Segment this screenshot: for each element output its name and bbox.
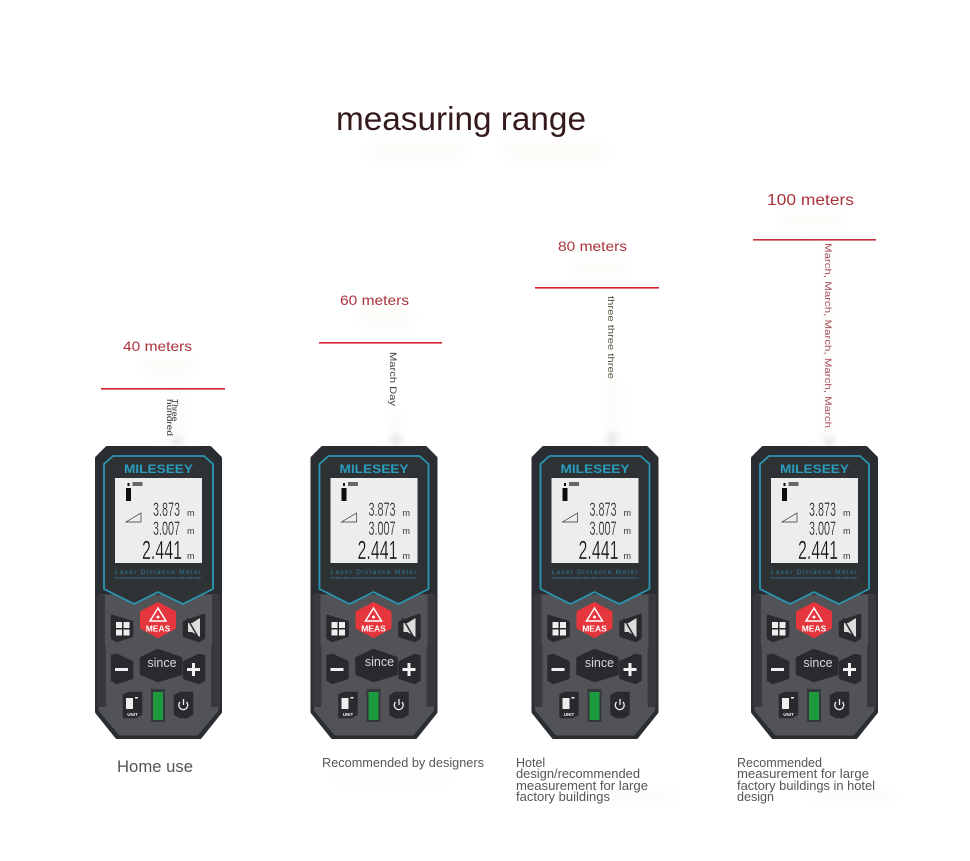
minus button <box>328 655 348 683</box>
minus button <box>768 655 788 683</box>
MEAS button: MEAS <box>802 624 827 634</box>
teal bezel <box>320 456 428 604</box>
caption: factory buildings: design <box>737 790 774 804</box>
vertical note: March Day <box>387 352 398 406</box>
column: 100 meters <box>753 192 876 428</box>
MEAS button: MEAS <box>582 624 607 634</box>
measure line <box>535 287 659 289</box>
vertical note: three three three <box>605 296 616 379</box>
product caption: Laser Distance Meter <box>552 569 638 576</box>
unit button: UNIT <box>343 712 353 717</box>
LCD screen: 2.441 <box>142 535 182 565</box>
plus button <box>184 655 204 683</box>
vertical note: March, March, March, March, March <box>822 243 833 428</box>
center key: since <box>585 656 614 670</box>
mute button <box>400 615 420 641</box>
unit button: UNIT <box>127 712 138 717</box>
power button <box>831 693 848 717</box>
caption: factory buildings <box>737 756 875 804</box>
unit button <box>340 693 356 717</box>
range label: 60 meters <box>340 292 409 308</box>
device 1 <box>97 448 220 737</box>
MEAS button <box>578 603 612 637</box>
brand: MILESEEY <box>780 464 849 476</box>
body <box>753 448 876 737</box>
LCD screen <box>552 478 638 565</box>
LCD screen: m <box>843 508 850 518</box>
LCD screen: 3.873 <box>368 500 396 521</box>
measure line <box>753 239 876 241</box>
LCD screen: m <box>402 508 410 518</box>
LCD screen: 3.007 <box>153 519 180 540</box>
unit button: UNIT <box>783 712 794 717</box>
LCD screen <box>771 478 858 565</box>
column: 60 meters <box>319 292 442 406</box>
center key: since <box>365 655 394 669</box>
LCD screen: 3.007 <box>809 519 836 540</box>
MEAS button <box>141 603 175 637</box>
level bubble <box>151 689 165 722</box>
caption: designers: Recommended by designers <box>322 756 484 770</box>
title: measuring range <box>336 100 586 137</box>
menu button <box>328 616 348 641</box>
level bubble <box>807 689 821 722</box>
device 3 <box>534 448 656 737</box>
LCD screen: m <box>843 551 850 561</box>
LCD screen: 3.873 <box>809 500 836 521</box>
teal bezel <box>104 456 213 604</box>
range label: 100 meters <box>767 192 854 209</box>
body <box>534 448 656 737</box>
LCD screen: 3.007 <box>368 519 396 540</box>
power button <box>175 693 192 717</box>
unit button: UNIT <box>564 712 574 717</box>
minus button <box>112 655 132 683</box>
center key <box>578 650 618 681</box>
device 4 <box>753 448 876 737</box>
range label: 80 meters <box>558 238 627 254</box>
center key <box>141 650 181 681</box>
caption: hotel design: factory buildings <box>516 790 610 804</box>
caption: hotel design <box>516 756 648 804</box>
MEAS button <box>356 603 390 637</box>
LCD screen: 3.007 <box>590 519 616 540</box>
measure line <box>101 388 225 390</box>
column: 40 meters <box>101 338 225 436</box>
LCD screen: m <box>843 526 850 536</box>
center key <box>797 650 837 681</box>
LCD screen: 2.441 <box>798 535 838 565</box>
caption: hotel design: design/recommended <box>516 767 640 781</box>
LCD screen: 3.873 <box>590 500 616 521</box>
LCD screen: m <box>624 508 631 518</box>
center key <box>356 650 396 681</box>
caption: home use: Home use <box>117 758 193 776</box>
caption: factory buildings: measurement for large <box>737 767 869 781</box>
range label: 40 meters <box>123 338 192 354</box>
plus button <box>400 655 420 683</box>
teal bezel <box>760 456 869 604</box>
mute button <box>620 615 640 641</box>
LCD screen: m <box>402 551 410 561</box>
LCD screen: 2.441 <box>578 535 618 565</box>
product caption: Laser Distance Meter <box>771 569 858 576</box>
menu button <box>548 616 568 641</box>
level bubble <box>588 689 602 722</box>
LCD screen: m <box>402 526 410 536</box>
product caption: Laser Distance Meter <box>115 569 202 576</box>
brand: MILESEEY <box>340 464 409 476</box>
minus button <box>548 655 568 683</box>
body <box>312 448 436 737</box>
vertical note <box>165 399 180 436</box>
LCD screen <box>115 478 202 565</box>
product caption: Laser Distance Meter <box>330 569 417 576</box>
LCD screen <box>330 478 418 565</box>
LCD screen: m <box>187 508 194 518</box>
LCD screen: m <box>624 526 631 536</box>
power button <box>612 693 628 717</box>
center key: since <box>803 656 833 670</box>
caption: factory buildings: Recommended <box>737 756 822 770</box>
device 2 <box>312 448 436 737</box>
measure line <box>319 342 442 344</box>
plus button <box>840 655 860 683</box>
mute button <box>840 615 860 641</box>
LCD screen: 3.873 <box>153 500 180 521</box>
center key: since <box>147 656 177 670</box>
menu button <box>112 616 132 641</box>
LCD screen: m <box>187 526 194 536</box>
MEAS button: MEAS <box>146 624 171 634</box>
LCD screen: m <box>624 551 631 561</box>
LCD screen: 2.441 <box>358 535 398 565</box>
power button <box>390 693 408 717</box>
menu button <box>768 616 788 641</box>
vertical note: Three <box>170 399 180 421</box>
MEAS button <box>797 603 831 637</box>
mute button <box>184 615 204 641</box>
unit button <box>560 693 578 717</box>
caption: hotel design: Hotel <box>516 756 545 770</box>
column: 80 meters <box>535 238 659 379</box>
plus button <box>620 655 640 683</box>
level bubble <box>366 689 380 722</box>
body <box>97 448 220 737</box>
brand: MILESEEY <box>560 464 630 476</box>
caption: factory buildings: factory buildings in hotel <box>737 779 875 793</box>
brand: MILESEEY <box>124 464 193 476</box>
unit button <box>780 693 797 717</box>
unit button <box>124 693 141 717</box>
LCD screen: m <box>187 551 194 561</box>
caption: hotel design: measurement for large <box>516 779 648 793</box>
MEAS button: MEAS <box>361 624 386 634</box>
vertical note: hundred <box>165 399 175 436</box>
teal bezel <box>540 456 650 604</box>
